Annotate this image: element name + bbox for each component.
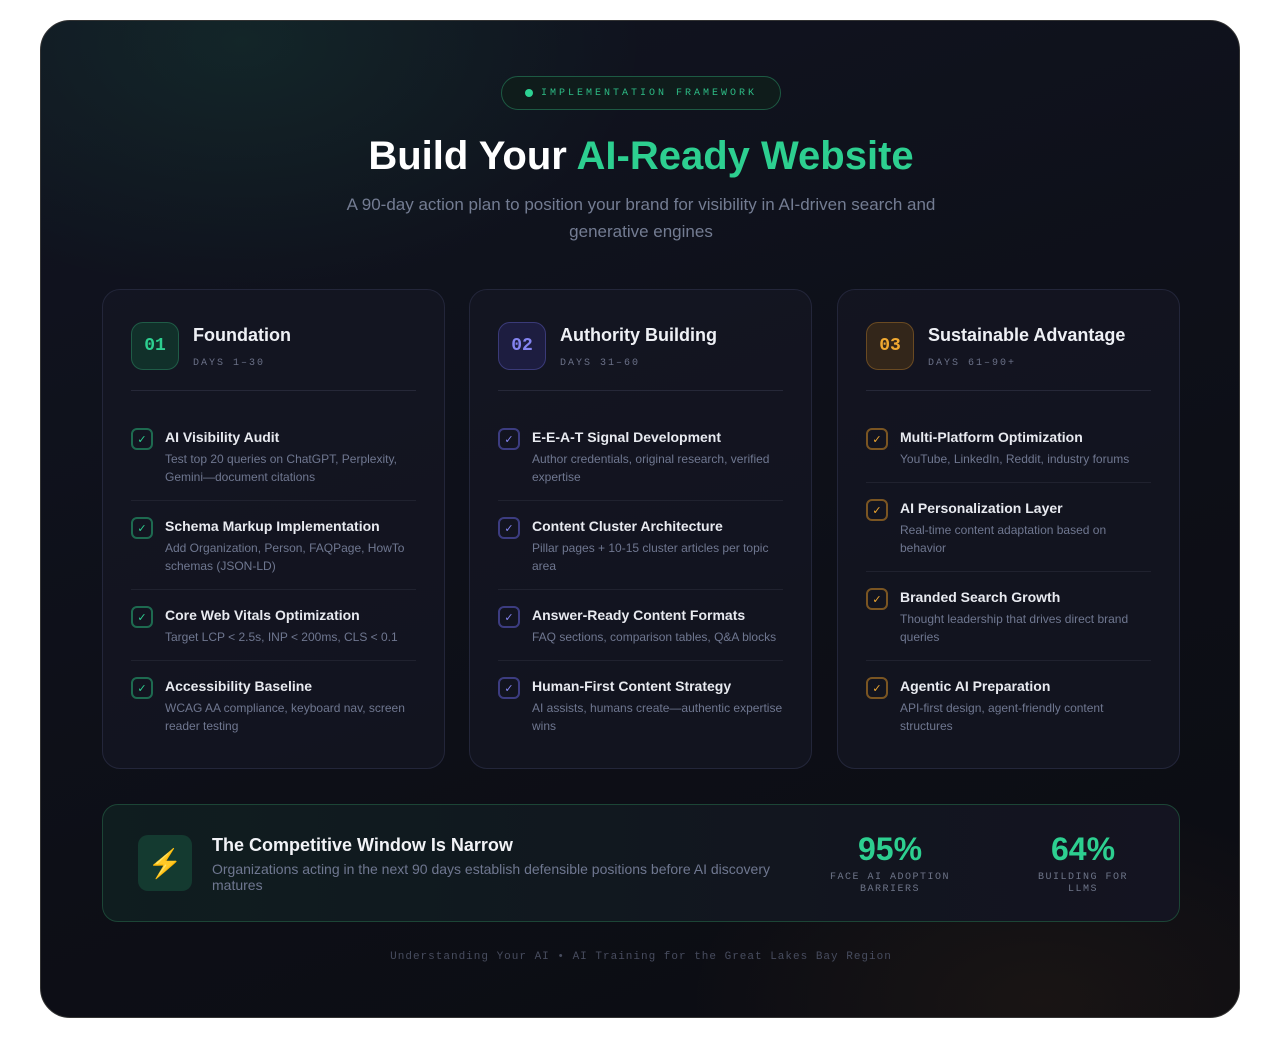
header: 03 (879, 336, 901, 356)
items: Schema Markup Implementation (165, 518, 380, 534)
subtitle: A 90-day action plan to position your brand for visibility in AI-driven search and generative engines (347, 195, 935, 241)
items (131, 428, 416, 733)
header: Authority Building (560, 325, 717, 345)
callout text: The Competitive Window Is Narrow (212, 835, 513, 855)
header (498, 322, 717, 370)
items: API-first design, agent-friendly content structures (900, 701, 1103, 733)
stat: 64% (1038, 831, 1128, 895)
items: Content Cluster Architecture (532, 518, 723, 534)
items: Add Organization, Person, FAQPage, HowTo schemas (JSON-LD) (165, 541, 404, 573)
items: Agentic AI Preparation (900, 678, 1050, 694)
items: Pillar pages + 10-15 cluster articles per topic area (532, 541, 768, 573)
items: E-E-A-T Signal Development (532, 429, 721, 445)
items: ✓ (504, 612, 514, 624)
header: DAYS 31–60 (560, 358, 640, 369)
items: ✓ (872, 504, 882, 516)
stat: 64%: LLMS (1068, 884, 1098, 895)
callout text (212, 835, 770, 893)
callout text: Organizations acting in the next 90 days establish defensible positions before AI discovery matures (212, 861, 770, 893)
items: ✓ (137, 522, 147, 534)
header: 01 (144, 336, 166, 356)
items: Test top 20 queries on ChatGPT, Perplexity, Gemini—document citations (165, 452, 397, 484)
items: Branded Search Growth (900, 589, 1060, 605)
stat: 95%: FACE AI ADOPTION (830, 872, 950, 883)
callout: competitive window (102, 804, 1180, 922)
stat: 95%: 95% (858, 831, 922, 867)
icon: lightning: ⚡ (148, 848, 182, 878)
stat: 95% (830, 831, 950, 895)
items: Human-First Content Strategy (532, 678, 731, 694)
items: Answer-Ready Content Formats (532, 607, 745, 623)
panel: authority (469, 289, 812, 769)
items: AI assists, humans create—authentic expertise wins (532, 701, 782, 733)
items: ✓ (504, 434, 514, 446)
items: ✓ (872, 682, 882, 694)
items: ✓ (872, 594, 882, 606)
items: Accessibility Baseline (165, 678, 312, 694)
items: AI Personalization Layer (900, 500, 1063, 516)
stat: 64%: 64% (1051, 831, 1115, 867)
items: Target LCP < 2.5s, INP < 200ms, CLS < 0.1 (165, 630, 398, 644)
header: Foundation (193, 325, 291, 345)
footer: Understanding Your AI • AI Training for the Great Lakes Bay Region (390, 951, 892, 963)
title: Build Your AI-Ready Website (368, 134, 914, 178)
badge pill (501, 76, 781, 110)
items: AI Visibility Audit (165, 429, 279, 445)
items: ✓ (504, 682, 514, 694)
items: ✓ (137, 612, 147, 624)
panel: sustainable (837, 289, 1180, 769)
items: YouTube, LinkedIn, Reddit, industry forums (900, 452, 1129, 466)
stat: 64%: BUILDING FOR (1038, 872, 1128, 883)
header: DAYS 61–90+ (928, 358, 1016, 369)
items: ✓ (504, 522, 514, 534)
header: DAYS 1–30 (193, 358, 265, 369)
header: 02 (511, 336, 533, 356)
stat: 95%: BARRIERS (860, 884, 920, 895)
header: Sustainable Advantage (928, 325, 1125, 345)
items: Core Web Vitals Optimization (165, 607, 360, 623)
badge pill: IMPLEMENTATION FRAMEWORK (541, 88, 757, 98)
items: Author credentials, original research, verified expertise (532, 452, 769, 484)
items (498, 428, 783, 733)
header (866, 322, 1125, 370)
items: WCAG AA compliance, keyboard nav, screen reader testing (165, 701, 405, 733)
header (131, 322, 291, 370)
panel: foundation (102, 289, 445, 769)
items: ✓ (137, 434, 147, 446)
items (866, 428, 1151, 733)
icon: lightning (138, 835, 192, 891)
items: Real-time content adaptation based on behavior (900, 523, 1106, 555)
items: FAQ sections, comparison tables, Q&A blocks (532, 630, 776, 644)
items: ✓ (872, 434, 882, 446)
items: ✓ (137, 682, 147, 694)
items: Multi-Platform Optimization (900, 429, 1083, 445)
items: Thought leadership that drives direct brand queries (900, 612, 1128, 644)
